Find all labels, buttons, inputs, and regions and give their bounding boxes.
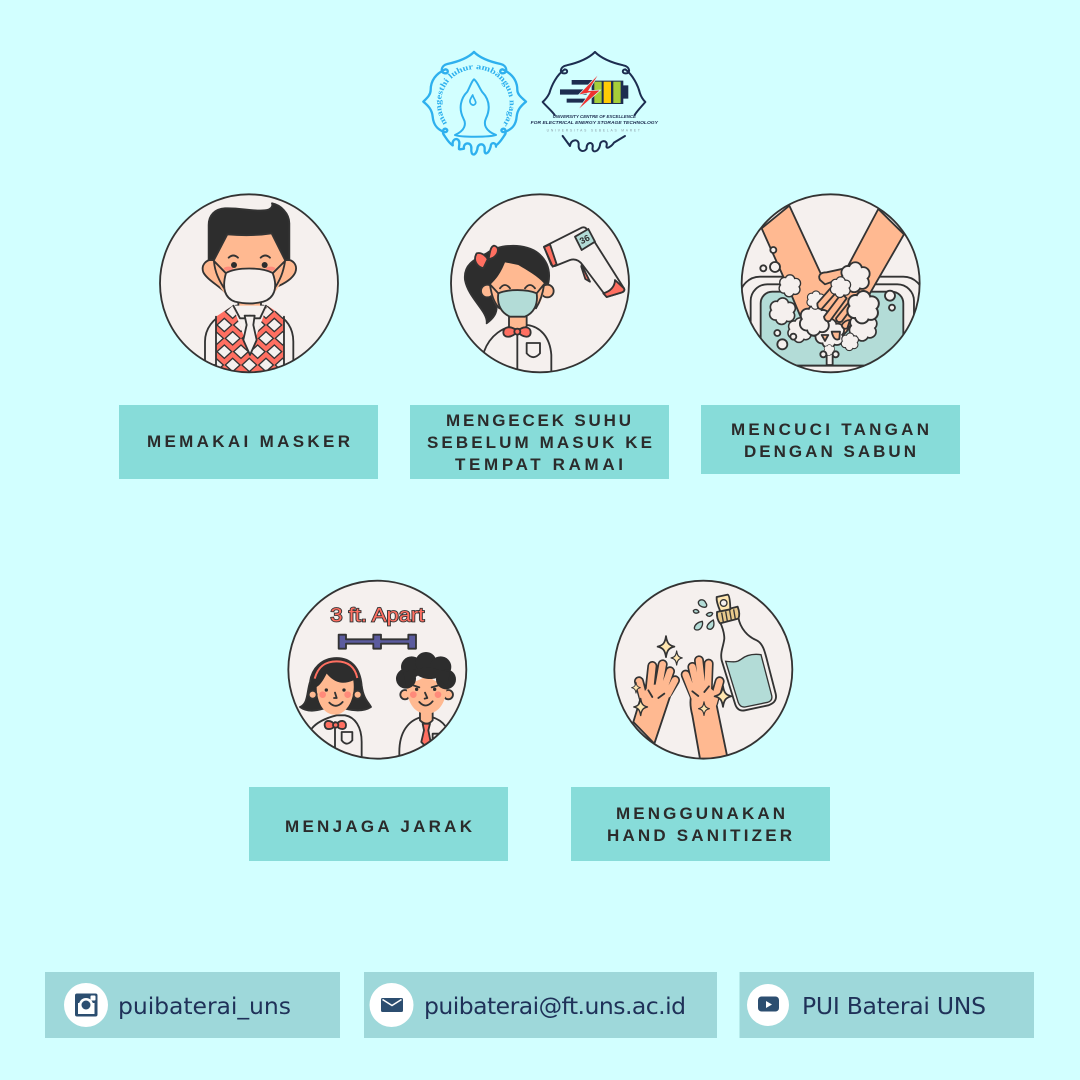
contact: email xyxy=(364,972,717,1038)
label box: mengecek suhu: SEBELUM MASUK KE xyxy=(427,433,652,452)
icon: envelope xyxy=(381,998,403,1012)
contact: youtube xyxy=(740,972,1034,1038)
panel: mencuci tangan xyxy=(701,194,960,474)
logo: University Centre of Excellence: UNIVERSITAS SEBELAS MARET xyxy=(547,128,640,132)
logo: University Centre of Excellence xyxy=(531,52,659,151)
label box: mencuci tangan: MENCUCI TANGAN xyxy=(731,420,929,439)
label box: mengecek suhu xyxy=(410,405,669,479)
label box: menjaga jarak: MENJAGA JARAK xyxy=(285,817,473,836)
label box: menjaga jarak xyxy=(249,787,508,861)
icon: instagram xyxy=(75,994,98,1016)
label box: memakai masker: MEMAKAI MASKER xyxy=(147,432,350,451)
label box: mengecek suhu: MENGECEK SUHU xyxy=(446,411,631,430)
heading: 3 ft. Apart: 3 ft. Apart xyxy=(330,605,425,626)
contact: email: puibaterai@ft.uns.ac.id xyxy=(424,992,686,1020)
icon: hands washing with soap xyxy=(740,194,923,387)
panel: mengecek suhu xyxy=(410,194,669,479)
logo: Universitas Sebelas Maret xyxy=(422,50,528,156)
right hand xyxy=(686,660,728,759)
logo: Universitas Sebelas Maret: mangesthi luhur ambangun nagara xyxy=(436,65,514,127)
icon: man wearing mask xyxy=(160,194,338,373)
panel: menjaga jarak xyxy=(249,581,508,861)
label box: mengecek suhu: TEMPAT RAMAI xyxy=(455,455,623,474)
contact: youtube: PUI Baterai UNS xyxy=(802,992,986,1020)
icon: two students keeping distance xyxy=(288,581,466,762)
panel: hand sanitizer xyxy=(571,581,830,861)
label box: mencuci tangan: DENGAN SABUN xyxy=(744,442,916,461)
label box: memakai masker xyxy=(119,405,378,479)
label box: hand sanitizer: HAND SANITIZER xyxy=(607,826,792,845)
logo: University Centre of Excellence: UNIVERSITY CENTRE OF EXCELLENCE xyxy=(553,114,637,119)
icon: hands and sanitizer spray xyxy=(614,581,792,759)
label box: mencuci tangan xyxy=(701,405,960,474)
left hand xyxy=(633,664,675,744)
icon: play button xyxy=(758,996,779,1012)
label box: hand sanitizer xyxy=(571,787,830,861)
panel: memakai masker xyxy=(119,194,378,479)
icon: girl with thermometer gun xyxy=(451,194,629,375)
contact: instagram xyxy=(45,972,340,1038)
label box: hand sanitizer: MENGGUNAKAN xyxy=(616,804,785,823)
contact: instagram: puibaterai_uns xyxy=(118,992,291,1020)
logo: University Centre of Excellence: FOR ELECTRICAL ENERGY STORAGE TECHNOLOGY xyxy=(531,120,659,125)
icon: girl with thermometer gun: 36 xyxy=(578,233,591,246)
